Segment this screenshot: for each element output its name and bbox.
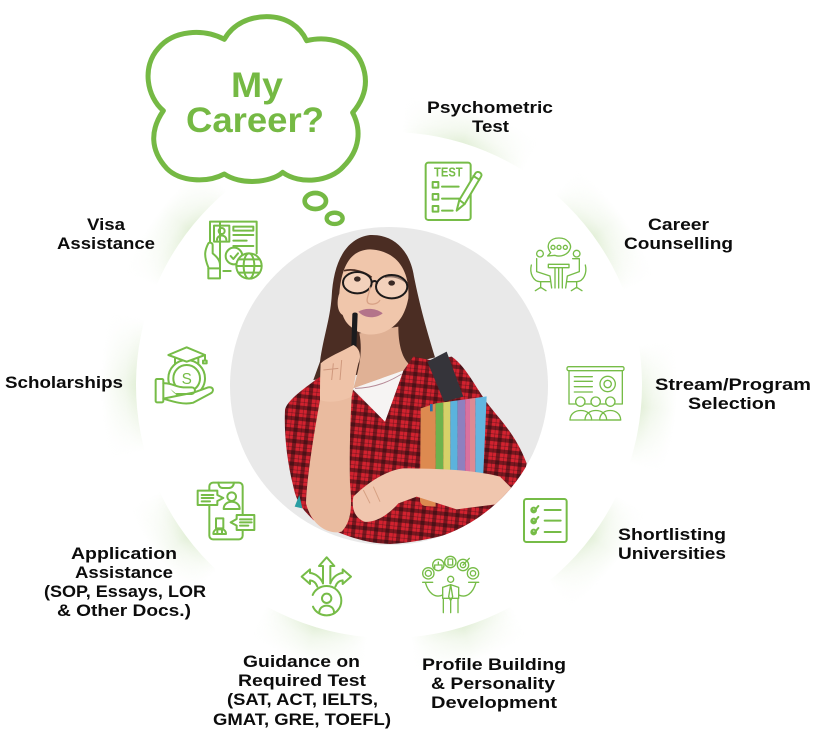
- label: Visa Assistance: [57, 215, 155, 253]
- label: Career Counselling: Career: [648, 215, 709, 234]
- icon: guidance arrows: [302, 557, 351, 615]
- label: Application Assistance: (SOP, Essays, LOR: [44, 582, 206, 601]
- label: Shortlisting Universities: Universities: [618, 544, 726, 563]
- icon: application on phone: [198, 483, 254, 539]
- icon: presentation board: [567, 367, 624, 420]
- icon: visa and globe: [205, 222, 262, 279]
- label: Profile Building & Personality Development: & Personality: [431, 674, 556, 693]
- white central disk: [136, 132, 642, 638]
- label: Profile Building & Personality Development: Profile Building: [422, 655, 566, 674]
- icon: test sheet: [426, 163, 482, 220]
- icon: scholarship coin and hand: [156, 347, 213, 403]
- label: Psychometric Test: Psychometric: [427, 98, 553, 117]
- cloud title: My Career?: My: [231, 66, 284, 105]
- label: Guidance on Required Test: Required Test: [238, 671, 366, 690]
- label: Scholarships: Scholarships: [5, 373, 123, 392]
- label: Career Counselling: Counselling: [624, 234, 733, 253]
- portrait: thinking student: [285, 235, 527, 544]
- label: Shortlisting Universities: Shortlisting: [618, 525, 726, 544]
- label: Application Assistance: Assistance: [75, 563, 173, 582]
- label: Psychometric Test: Test: [472, 117, 509, 136]
- icon: test sheet: TEST: [434, 165, 463, 179]
- icon: juggling professional: [423, 556, 479, 613]
- label: Shortlisting Universities: [618, 525, 726, 563]
- label: Application Assistance: & Other Docs.): [57, 601, 191, 620]
- label: Profile Building & Personality Development: Development: [431, 693, 557, 712]
- label: Application Assistance: [44, 544, 206, 620]
- label: Stream/Program Selection: Stream/Program: [655, 375, 811, 394]
- cloud title: My Career?: [186, 66, 324, 140]
- label: Guidance on Required Test: (SAT, ACT, IELTS,: [227, 690, 378, 709]
- label: Profile Building & Personality Development: [422, 655, 566, 712]
- icon: scholarship coin and hand: S: [182, 371, 192, 388]
- label: Psychometric Test: [427, 98, 553, 136]
- cloud title: My Career?: Career?: [186, 101, 324, 140]
- label: Application Assistance: Application: [71, 544, 177, 563]
- label: Guidance on Required Test: Guidance on: [243, 652, 360, 671]
- label: Career Counselling: [624, 215, 733, 253]
- grey portrait circle: [230, 227, 548, 545]
- label: Stream/Program Selection: Selection: [688, 394, 776, 413]
- thought cloud: [148, 17, 365, 224]
- green glow wedges around the disk: [111, 117, 666, 652]
- label: Visa Assistance: Visa: [87, 215, 126, 234]
- icon: counselling: [531, 238, 586, 291]
- label: Visa Assistance: Assistance: [57, 234, 155, 253]
- label: Guidance on Required Test: [213, 652, 391, 729]
- icon: checklist: [524, 499, 567, 542]
- label: Stream/Program Selection: [655, 375, 811, 413]
- label: Guidance on Required Test: GMAT, GRE, TOEFL): [213, 710, 391, 729]
